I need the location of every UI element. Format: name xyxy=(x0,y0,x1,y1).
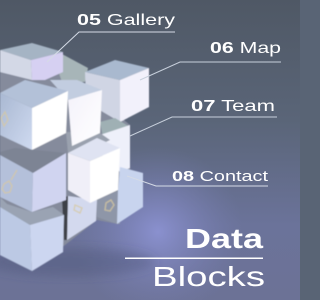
title: Data: Data xyxy=(185,223,264,254)
cube: team upper right xyxy=(97,118,130,172)
cube: front left top xyxy=(0,80,68,150)
leader line: 08 Contact xyxy=(127,176,268,186)
cube: center white xyxy=(68,138,120,203)
leader line: 07 Team xyxy=(130,117,277,136)
leader line: 05 Gallery xyxy=(47,32,175,62)
cube: bottom middle xyxy=(62,196,97,240)
cube: small right xyxy=(97,167,143,224)
cube: back middle xyxy=(55,54,88,82)
cube: middle marble xyxy=(66,132,110,153)
label: 07 Team: 07 Team xyxy=(191,98,275,115)
cube: front second xyxy=(50,80,102,146)
cube: map top right xyxy=(85,60,149,122)
title divider xyxy=(125,258,263,259)
leader line: 06 Map xyxy=(140,62,281,80)
cube: middle left xyxy=(0,148,66,212)
cube: bottom left xyxy=(0,197,64,271)
label: 08 Contact: 08 Contact xyxy=(172,168,269,185)
cube stack xyxy=(0,43,155,276)
label: 05 Gallery: 05 Gallery xyxy=(77,12,175,29)
molecule patterns xyxy=(1,112,114,213)
shadow under stack xyxy=(0,248,155,276)
label: 06 Map: 06 Map xyxy=(210,40,281,57)
cube: gallery top left xyxy=(0,43,63,80)
interior of stack xyxy=(0,60,130,270)
title: Blocks: Blocks xyxy=(152,261,265,292)
